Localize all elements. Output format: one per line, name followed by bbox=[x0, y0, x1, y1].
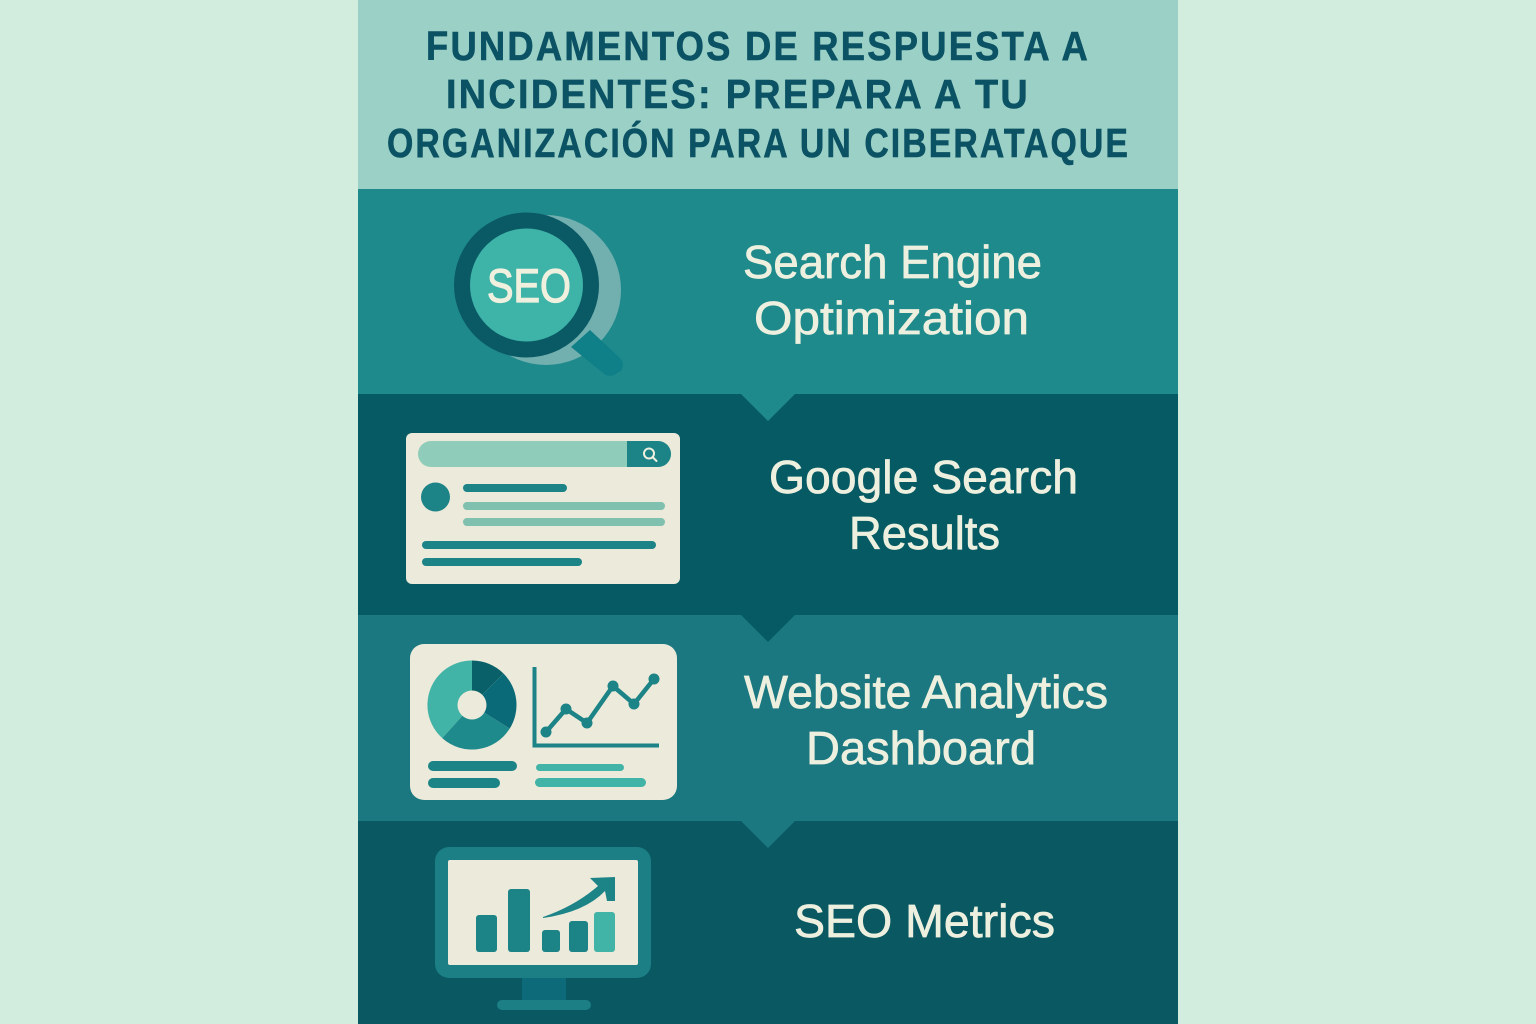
label: Google Search Results: Google Search bbox=[769, 451, 1078, 503]
icon: SEO magnifying glass bbox=[462, 215, 623, 376]
title: ORGANIZACIÓN PARA UN CIBERATAQUE bbox=[387, 120, 1130, 166]
label: Search Engine Optimization: Search Engine bbox=[743, 236, 1042, 288]
panel: Google Search Results bbox=[358, 394, 1178, 615]
label: Website Analytics Dashboard bbox=[744, 666, 1108, 774]
line chart bbox=[534, 667, 660, 746]
icon: monitor with bar chart bbox=[435, 847, 651, 1010]
panel: SEO Metrics bbox=[358, 821, 1178, 1024]
title: INCIDENTES: PREPARA A TU bbox=[446, 71, 1030, 117]
icon: search results card bbox=[406, 433, 680, 584]
title bbox=[387, 23, 1130, 166]
donut chart bbox=[427, 660, 517, 750]
icon: SEO magnifying glass: SEO bbox=[487, 259, 571, 312]
label: Website Analytics Dashboard: Dashboard bbox=[806, 722, 1036, 774]
label: Google Search Results: Results bbox=[849, 507, 1000, 559]
panel: Website Analytics Dashboard bbox=[358, 615, 1178, 821]
label: SEO Metrics: SEO Metrics bbox=[794, 895, 1055, 947]
arrow: step one to two bbox=[741, 394, 795, 421]
label: Search Engine Optimization: Optimization bbox=[754, 292, 1029, 344]
arrow: step three to four bbox=[741, 821, 795, 848]
title: FUNDAMENTOS DE RESPUESTA A bbox=[426, 23, 1090, 69]
icon: analytics dashboard card bbox=[410, 644, 677, 800]
label: Google Search Results bbox=[769, 451, 1078, 559]
label: Search Engine Optimization bbox=[743, 236, 1042, 344]
panel: title header bbox=[358, 0, 1178, 189]
panel: Search Engine Optimization bbox=[358, 189, 1178, 394]
label: Website Analytics Dashboard: Website Analytics bbox=[744, 666, 1108, 718]
arrow: step two to three bbox=[741, 615, 795, 642]
